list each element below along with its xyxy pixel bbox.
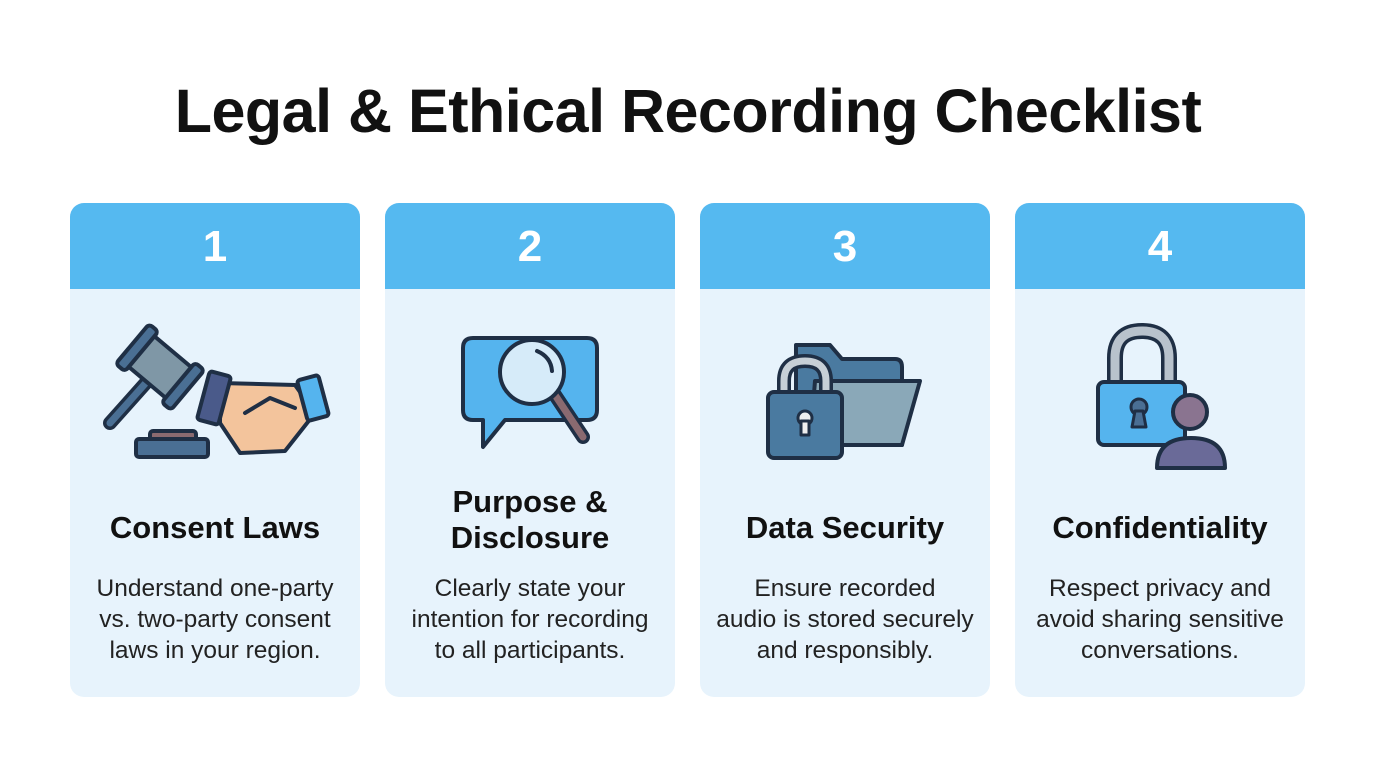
heading: Purpose & bbox=[452, 484, 608, 519]
description bbox=[412, 575, 648, 664]
panel: data security bbox=[700, 203, 990, 697]
heading bbox=[451, 484, 609, 555]
panel: purpose & disclosure bbox=[385, 203, 675, 697]
description: audio is stored securely bbox=[716, 606, 974, 633]
panel: confidentiality bbox=[1015, 203, 1305, 697]
description: Ensure recorded bbox=[754, 575, 936, 602]
icon: folder with lock bbox=[766, 343, 922, 460]
description: intention for recording bbox=[412, 606, 648, 633]
number header 1: 1 bbox=[203, 222, 227, 271]
number header 1 bbox=[70, 203, 360, 289]
description: laws in your region. bbox=[109, 637, 321, 664]
panel: consent laws bbox=[70, 203, 360, 697]
description: vs. two-party consent bbox=[99, 606, 331, 633]
description bbox=[716, 575, 974, 664]
description: and responsibly. bbox=[757, 637, 933, 664]
number header 2: 2 bbox=[518, 222, 542, 271]
heading: Consent Laws bbox=[110, 510, 320, 545]
description: Clearly state your bbox=[435, 575, 625, 602]
number header 3: 3 bbox=[833, 222, 857, 271]
heading: Confidentiality bbox=[1052, 510, 1268, 545]
title: Legal & Ethical Recording Checklist bbox=[175, 77, 1201, 145]
heading: Disclosure bbox=[451, 520, 609, 555]
description bbox=[1036, 575, 1284, 664]
icon: gavel and handshake bbox=[103, 324, 330, 459]
description: Understand one-party bbox=[96, 575, 333, 602]
number header 4: 4 bbox=[1148, 222, 1172, 271]
icon: lock with person bbox=[1096, 323, 1227, 470]
description: conversations. bbox=[1081, 637, 1239, 664]
description: Respect privacy and bbox=[1049, 575, 1271, 602]
number header 4 bbox=[1015, 203, 1305, 289]
description bbox=[96, 575, 334, 664]
heading: Data Security bbox=[746, 510, 944, 545]
description: to all participants. bbox=[435, 637, 625, 664]
description: avoid sharing sensitive bbox=[1036, 606, 1284, 633]
icon: speech bubble with magnifier bbox=[461, 336, 599, 450]
number header 3 bbox=[700, 203, 990, 289]
number header 2 bbox=[385, 203, 675, 289]
